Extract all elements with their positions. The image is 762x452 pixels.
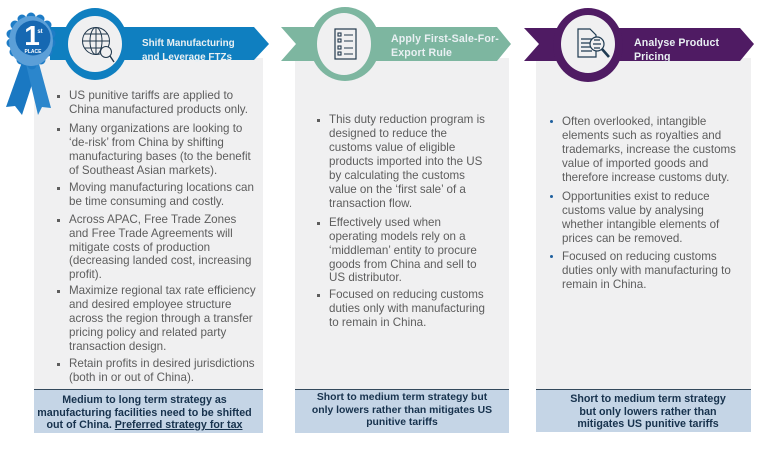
heading: product pricing: Analyse Product xyxy=(634,37,719,49)
callout: product pricing strategy: but only lowers rather than xyxy=(579,406,717,418)
icon: document with magnifier xyxy=(577,28,610,58)
text: shift manufacturing bullets: and desired employee structure xyxy=(69,298,231,311)
text: product pricing bullets xyxy=(550,115,736,291)
text: shift manufacturing bullets: profit). xyxy=(69,268,102,281)
heading: first sale: Export Rule xyxy=(391,46,452,58)
callout: medium to long term strategy: Medium to long term strategy as xyxy=(62,394,227,406)
icon: checklist document xyxy=(334,28,357,60)
icon: first place ribbon xyxy=(6,12,56,115)
text: first sale bullets: ‘middleman’ entity to procure xyxy=(329,244,477,257)
text: shift manufacturing bullets: Across APAC, Free Trade Zones xyxy=(69,213,236,226)
text: shift manufacturing bullets: and Free Trade Agreements will xyxy=(69,227,233,240)
text: shift manufacturing bullets: (both in or out of China). xyxy=(69,371,194,384)
text: product pricing bullets: Focused on reducing customs xyxy=(562,250,717,263)
text: first sale bullets: by calculating the customs xyxy=(329,169,465,182)
text: product pricing bullets: trademarks, increase the customs xyxy=(562,143,736,156)
text: first sale bullets: Focused on reducing customs xyxy=(329,288,484,301)
callout: product pricing strategy xyxy=(536,389,751,432)
callout: first sale strategy xyxy=(295,389,509,433)
text: shift manufacturing bullets: be time consuming and costly. xyxy=(69,195,224,208)
callout: first sale strategy: Short to medium term strategy but xyxy=(317,392,487,403)
text: shift manufacturing bullets: US punitive tariffs are applied to xyxy=(69,89,233,102)
heading: product pricing xyxy=(634,37,719,62)
text: product pricing bullets: value of imported goods and xyxy=(562,157,708,170)
text: first sale bullets: duties only with manufacturing xyxy=(329,302,485,315)
callout: product pricing strategy: mitigates US punitive tariffs xyxy=(577,418,719,430)
text: first sale bullets: to remain in China. xyxy=(329,316,426,329)
text: product pricing bullets: customs value by analysing xyxy=(562,204,704,217)
text: shift manufacturing bullets: Maximize regional tax rate efficiency xyxy=(69,284,256,297)
text: shift manufacturing bullets: Retain profits in desired jurisdictions xyxy=(69,357,255,370)
heading: first sale: Apply First-Sale-For- xyxy=(391,33,499,45)
text: first sale bullets: goods from China and sell to xyxy=(329,258,477,271)
heading: shift manufacturing xyxy=(142,38,235,62)
icon: first place ribbon: st xyxy=(37,29,43,35)
text: product pricing bullets: whether intangible elements of xyxy=(562,218,719,231)
text: shift manufacturing bullets: pricing policy and related party xyxy=(69,326,226,339)
callout: medium to long term strategy: manufacturing facilities need to be shifted xyxy=(37,407,252,419)
text: product pricing bullets: duties only with manufacturing to xyxy=(562,264,731,277)
text: shift manufacturing bullets xyxy=(57,89,256,384)
panel: shift manufacturing background xyxy=(34,58,263,390)
text: shift manufacturing bullets: ‘de-risk’ from China by shifting xyxy=(69,136,224,149)
callout: first sale strategy: punitive tariffs xyxy=(366,417,438,428)
text: shift manufacturing bullets: China manufactured products only. xyxy=(69,103,248,116)
text: shift manufacturing bullets: manufacturing bases (to the benefit xyxy=(69,150,251,163)
callout: first sale strategy: only lowers rather than mitigates US xyxy=(312,405,492,416)
text: product pricing bullets: Often overlooked, intangible xyxy=(562,115,706,128)
panel: first-sale background xyxy=(295,58,509,390)
icon: first place ribbon: 1 xyxy=(24,20,40,51)
panel: product pricing background xyxy=(536,58,751,390)
text: shift manufacturing bullets: across the region through a transfer xyxy=(69,312,253,325)
heading: shift manufacturing: Shift Manufacturing xyxy=(142,38,235,49)
text: first sale bullets: operating models rely on a xyxy=(329,230,466,243)
text: shift manufacturing bullets: (decreasing landed cost, increasing xyxy=(69,254,251,267)
heading: product pricing: Pricing xyxy=(634,50,671,62)
text: first sale bullets: products imported into the US xyxy=(329,155,482,168)
callout: medium to long term strategy xyxy=(34,389,263,433)
text: product pricing bullets: therefore increase customs duty. xyxy=(562,171,729,184)
icon: globe with magnifier xyxy=(82,27,114,62)
heading: shift manufacturing: and Leverage FTZs xyxy=(142,52,232,62)
callout: product pricing strategy: Short to medium term strategy xyxy=(570,393,726,405)
text: shift manufacturing bullets: mitigate costs of production xyxy=(69,241,210,254)
heading: first sale xyxy=(391,33,499,58)
text: shift manufacturing bullets: Moving manufacturing locations can xyxy=(69,181,254,194)
text: first sale bullets: designed to reduce the xyxy=(329,127,447,140)
text: first sale bullets: customs value of eligible xyxy=(329,141,455,154)
text: first sale bullets xyxy=(317,113,485,329)
text: first sale bullets: transaction flow. xyxy=(329,197,412,210)
text: first sale bullets: Effectively used when xyxy=(329,216,441,229)
callout: medium to long term strategy: out of China. Preferred strategy for tax xyxy=(46,419,242,431)
text: product pricing bullets: elements such as royalties and xyxy=(562,129,721,142)
text: shift manufacturing bullets: of Southeast Asian markets). xyxy=(69,164,217,177)
text: first sale bullets: US distributor. xyxy=(329,271,402,284)
text: shift manufacturing bullets: Many organizations are looking to xyxy=(69,122,242,135)
text: first sale bullets: value on the ‘first sale’ of a xyxy=(329,183,466,196)
text: first sale bullets: This duty reduction program is xyxy=(329,113,485,126)
icon: first place ribbon: PLACE xyxy=(25,49,42,55)
text: product pricing bullets: remain in China. xyxy=(562,278,646,291)
text: shift manufacturing bullets: transaction design. xyxy=(69,340,166,353)
text: product pricing bullets: prices can be removed. xyxy=(562,232,683,245)
text: product pricing bullets: Opportunities exist to reduce xyxy=(562,190,710,203)
